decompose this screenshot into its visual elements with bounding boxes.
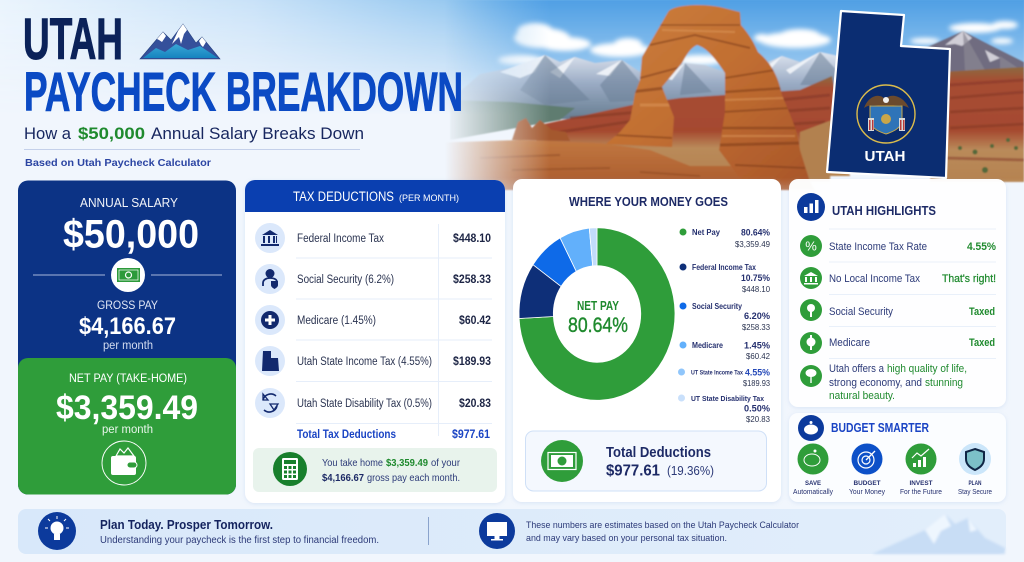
net per month: per month [102, 424, 153, 436]
distant mountain range [450, 52, 860, 122]
row: medicare: Medicare (1.45%) [297, 315, 376, 327]
panel: budget smarter [789, 413, 1006, 502]
legend: UT state income tax [678, 368, 771, 388]
total deductions box [526, 431, 766, 491]
total deductions text: Total Deductions [606, 445, 711, 461]
icon: piggy bank [798, 415, 824, 441]
icon: wallet [102, 441, 146, 485]
row: Utah state income tax: Utah State Income Tax (4.55%) [297, 356, 432, 368]
callout text [322, 457, 460, 484]
icon: light bulb [38, 512, 76, 550]
tip: budget: BUDGET [854, 480, 881, 487]
legend: federal income tax [680, 263, 771, 294]
gross pay label: GROSS PAY [97, 300, 158, 312]
subtitle [24, 124, 364, 143]
row: social security: Social Security [829, 306, 893, 318]
heading: TAX DEDUCTIONS [293, 189, 394, 204]
row: no local income tax [800, 267, 996, 289]
donut center label: NET PAY [577, 299, 620, 313]
sky gradient [8, 0, 1024, 104]
row: medicare [255, 305, 491, 335]
legend: UT state disability tax: 0.50% [744, 404, 770, 414]
heading: (PER MONTH) [399, 193, 459, 203]
row: Utah state disability tax: $20.83 [459, 398, 491, 410]
subtitle: How a [24, 124, 72, 143]
footer banner [18, 509, 1006, 554]
row: federal income tax: Federal Income Tax [297, 233, 384, 245]
footer message: Plan Today. Prosper Tomorrow. [100, 517, 273, 532]
decorative mountain [872, 514, 1005, 554]
row: social security: Social Security (6.2%) [297, 274, 394, 286]
legend: social security [680, 302, 771, 332]
photo: Delicate Arch landscape [400, 0, 1024, 190]
icon: cash [111, 258, 145, 292]
tip: plan [958, 443, 992, 496]
seal [857, 85, 915, 143]
row: state income tax rate [800, 235, 996, 257]
legend: social security: Social Security [692, 302, 742, 311]
callout text: $4,166.67 [322, 472, 364, 484]
callout text: You take home [322, 457, 383, 469]
subtitle: Annual Salary Breaks Down [151, 124, 364, 143]
row: Utah state income tax: $189.93 [453, 356, 491, 368]
legend: UT state disability tax [678, 394, 771, 424]
legend: UT state income tax: UT State Income Tax [691, 370, 744, 376]
tip: plan: PLAN [968, 480, 982, 487]
total tax deductions: $977.61 [452, 429, 491, 441]
panel: tax deductions [245, 180, 505, 503]
legend: net pay: 80.64% [741, 228, 770, 238]
legend: net pay: $3,359.49 [735, 240, 771, 249]
legend: UT state income tax: 4.55% [745, 368, 770, 378]
legend: UT state disability tax: UT State Disability Tax [691, 394, 765, 403]
panel: Utah highlights [789, 179, 1006, 407]
donut center label: 80.64% [568, 314, 628, 337]
row: state income tax rate: State Income Tax Rate [829, 241, 927, 253]
tip: plan: Stay Secure [958, 489, 992, 496]
icon: banknote [541, 440, 583, 482]
callout text: of your [431, 457, 460, 469]
row: medicare: Medicare [829, 337, 870, 349]
row: Utah state disability tax: Utah State Disability Tax (0.5%) [297, 398, 432, 410]
row: state income tax rate: 4.55% [967, 241, 996, 253]
title: Paycheck Breakdown: PAYCHECK BREAKDOWN [24, 62, 463, 122]
title: UTAH: UTAH [23, 7, 123, 72]
legend: federal income tax: 10.75% [741, 273, 770, 283]
legend: UT state disability tax: $20.83 [746, 415, 771, 424]
tip: budget: Your Money [849, 489, 885, 496]
callout: take home [253, 448, 497, 492]
icon: mountain logo [140, 24, 220, 59]
row: social security [800, 299, 995, 321]
footer message: Understanding your paycheck is the first step to financial freedom. [100, 535, 379, 546]
row: social security: $258.33 [453, 274, 491, 286]
legend: medicare: $60.42 [746, 352, 771, 361]
disclaimer [526, 520, 799, 544]
callout text: $3,359.49 [386, 457, 428, 469]
callout text: gross pay each month. [367, 472, 460, 484]
gross per month: per month [103, 340, 153, 352]
legend: net pay [680, 228, 771, 249]
panel: net pay [18, 358, 236, 494]
annual salary amount: $50,000 [63, 212, 199, 256]
row: no local income tax: That's right! [942, 273, 996, 285]
footer message [100, 517, 379, 546]
heading: UTAH HIGHLIGHTS [832, 203, 936, 218]
row: quality of life note: strong economy, and [829, 377, 922, 389]
legend: social security: 6.20% [744, 311, 770, 321]
row: medicare: Taxed [969, 337, 995, 349]
legend: medicare [680, 340, 771, 361]
tip: invest: For the Future [900, 489, 942, 496]
tip: save: Automatically [793, 489, 833, 496]
tip: invest [900, 444, 942, 496]
total tax deductions [297, 429, 491, 441]
legend [678, 228, 771, 424]
tip: save: SAVE [805, 480, 822, 487]
row: no local income tax: No Local Income Tax [829, 273, 920, 285]
legend: federal income tax: $448.10 [742, 285, 771, 294]
disclaimer: and may vary based on your personal tax situation. [526, 533, 727, 544]
net pay amount: $3,359.49 [56, 389, 198, 427]
tip: invest: INVEST [910, 480, 933, 487]
source note: Based on Utah Paycheck Calculator [25, 157, 211, 169]
tip: budget [849, 444, 885, 496]
legend: medicare: Medicare [692, 341, 723, 350]
gross pay amount: $4,166.67 [79, 313, 176, 340]
panel: salary summary [18, 180, 236, 494]
donut chart [519, 228, 675, 400]
Utah state shape with flag seal [827, 11, 950, 178]
row: medicare: $60.42 [459, 315, 491, 327]
icon: monitor [479, 513, 515, 549]
row: medicare [800, 332, 995, 354]
total tax deductions: Total Tax Deductions [297, 429, 396, 441]
total deductions text: (19.36%) [667, 463, 714, 478]
panel: where your money goes [513, 179, 781, 502]
row: quality of life note: stunning [925, 377, 963, 389]
row: social security [255, 264, 491, 294]
donut center label [568, 299, 628, 337]
tip: save [793, 444, 833, 496]
legend: federal income tax: Federal Income Tax [692, 263, 756, 272]
row: quality of life note: high quality of life, [887, 363, 967, 375]
icon: calculator [273, 452, 307, 486]
icon: bar chart [797, 193, 825, 221]
row: federal income tax: $448.10 [453, 233, 491, 245]
row: social security: Taxed [969, 306, 995, 318]
row: federal income tax [255, 223, 491, 253]
row: Utah state income tax [255, 346, 491, 376]
heading: BUDGET SMARTER [831, 421, 929, 435]
subtitle: $50,000 [78, 124, 145, 143]
legend: medicare: 1.45% [744, 340, 770, 350]
legend: social security: $258.33 [742, 323, 771, 332]
total deductions text: $977.61 [606, 462, 660, 480]
legend: UT state income tax: $189.93 [743, 379, 771, 388]
row: quality of life note: Utah offers a [829, 363, 884, 375]
state label: UTAH [864, 149, 906, 165]
row: quality of life note: natural beauty. [829, 390, 895, 402]
annual salary label: ANNUAL SALARY [80, 196, 179, 210]
heading: WHERE YOUR MONEY GOES [569, 194, 728, 209]
row: Utah state disability tax [255, 388, 491, 418]
net pay label: NET PAY (TAKE-HOME) [69, 373, 187, 385]
row: quality of life note [800, 363, 967, 402]
total deductions text [606, 445, 714, 480]
disclaimer: These numbers are estimates based on the Utah Paycheck Calculator [526, 520, 799, 531]
legend: net pay: Net Pay [692, 228, 721, 237]
row: state income tax rate: % [805, 238, 817, 254]
